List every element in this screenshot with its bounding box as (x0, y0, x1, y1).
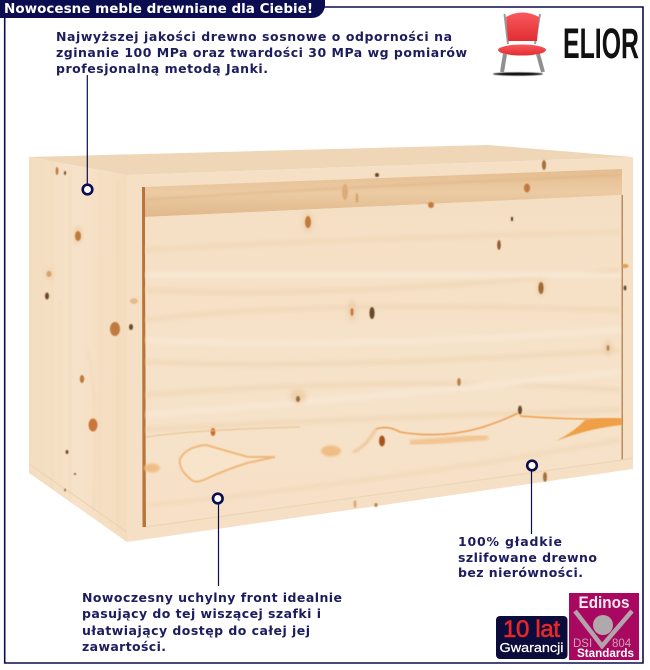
text block: tilting front: zawartości. (82, 639, 166, 654)
badge: 10 year warranty: 10 lat (503, 616, 560, 643)
marker: front callout (213, 494, 223, 586)
slit left (142, 187, 146, 527)
text block: wood quality: zginanie 100 MPa oraz twardości 30 MPa wg pomiarów (56, 45, 467, 60)
badge: Edinos standards: 804 (612, 638, 632, 650)
text block: tilting front: ułatwiający dostęp do całej jej (82, 623, 310, 638)
slit right (622, 195, 623, 460)
badge: 10 year warranty: Gwarancji (500, 640, 564, 655)
text block: smooth wood: bez nierówności. (458, 565, 583, 580)
orange grain vein left (144, 427, 300, 482)
bottom rail edge (146, 458, 633, 527)
text block: smooth wood (458, 534, 597, 580)
logo: Elior chair (493, 12, 546, 76)
text block: wood quality: Najwyższej jakości drewno sosnowe o odporności na (56, 29, 452, 44)
badge: Edinos standards: Edinos (578, 593, 630, 612)
cabinet interior shelf (142, 169, 622, 217)
header banner: Nowocesne meble drewniane dla Ciebie! (4, 1, 313, 17)
front panel (145, 195, 622, 527)
text block: wood quality (56, 29, 467, 76)
wooden wall cabinet (29, 145, 633, 542)
text block: smooth wood: szlifowane drewno (458, 550, 597, 565)
text block: tilting front: Nowoczesny uchylny front idealnie (82, 590, 342, 605)
text block: wood quality: profesjonalną metodą Janki. (56, 61, 268, 76)
wood knots (45, 160, 628, 508)
cabinet top surface (29, 145, 633, 175)
marker: smooth wood callout (527, 461, 537, 534)
interior streaks (146, 175, 620, 200)
text block: tilting front: pasujący do tej wiszącej szafki i (82, 606, 321, 621)
text block: tilting front (82, 590, 342, 654)
cabinet front frame (127, 157, 633, 542)
badge: Edinos standards (569, 593, 639, 660)
cabinet left side (29, 157, 127, 542)
badge: Edinos standards: Standards (577, 648, 634, 660)
text block: smooth wood: 100% gładkie (458, 534, 562, 549)
badge: 10 year warranty (496, 616, 568, 659)
marker: top callout (83, 75, 92, 194)
orange grain vein right (321, 413, 622, 456)
badge: Edinos standards: DSI (573, 638, 592, 650)
